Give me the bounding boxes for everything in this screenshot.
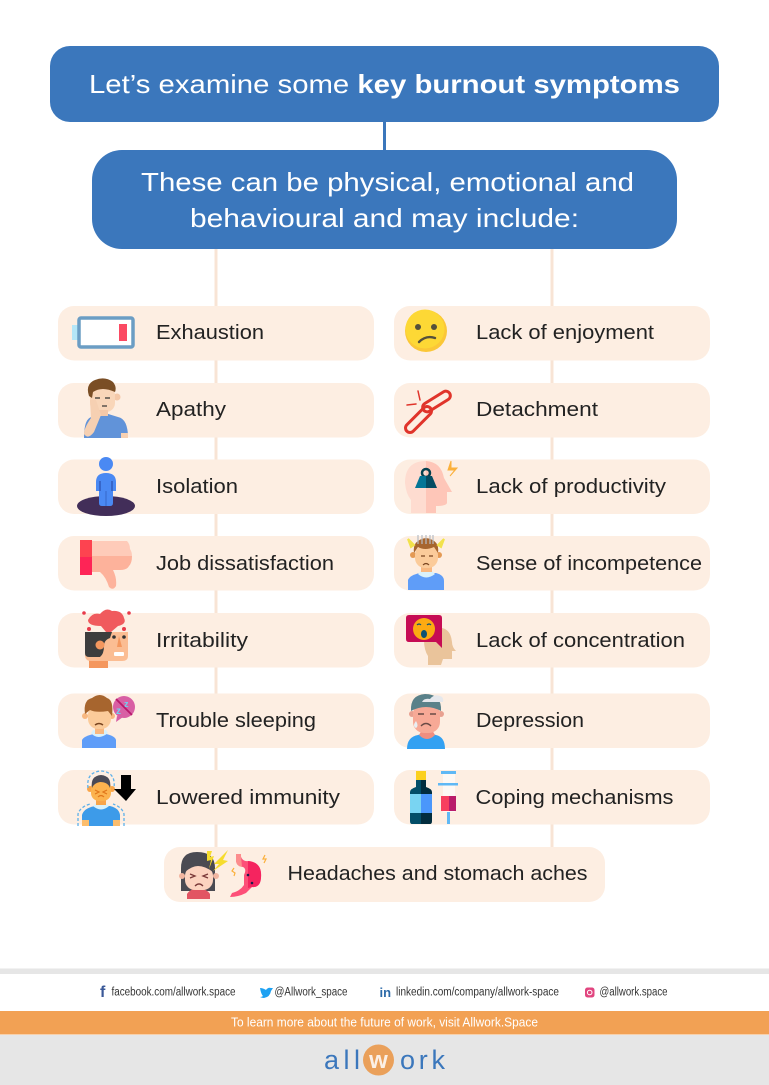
icon: instagram xyxy=(585,988,594,998)
icon: sick man with down arrow xyxy=(78,771,136,826)
icon: thumbs down xyxy=(80,540,132,589)
symptom: Isolation: Isolation xyxy=(156,476,238,498)
symptom: Lack of concentration xyxy=(394,613,710,668)
symptom: Apathy: Apathy xyxy=(156,399,226,421)
symptom: Sense of incompetence: Sense of incompetence xyxy=(476,553,702,575)
symptom: Coping mechanisms: Coping mechanisms xyxy=(476,787,674,809)
logo: allwork: all xyxy=(324,1045,360,1075)
subtitle banner: behavioural and may include: xyxy=(190,203,579,233)
symptom: Trouble sleeping xyxy=(58,694,374,748)
symptom: Exhaustion xyxy=(58,306,374,360)
instagram link: @allwork.space xyxy=(600,986,668,998)
subtitle banner: These can be physical, emotional and xyxy=(141,167,634,197)
icon: bored man xyxy=(84,378,128,438)
symptom: Sense of incompetence xyxy=(394,535,710,590)
symptom: Lack of enjoyment xyxy=(394,306,710,360)
symptom: Detachment: Detachment xyxy=(476,399,598,421)
subtitle banner xyxy=(92,150,677,249)
icon: isolated person xyxy=(77,457,135,516)
logo: allwork: w xyxy=(368,1047,388,1074)
symptom: Job dissatisfaction: Job dissatisfaction xyxy=(156,553,334,575)
footer top band xyxy=(0,968,769,974)
icon: linkedin: in xyxy=(380,985,391,1000)
symptom: Lack of enjoyment: Lack of enjoyment xyxy=(476,322,654,344)
icon: man with crossed-out sleep bubble: z xyxy=(124,699,129,709)
symptom: Irritability: Irritability xyxy=(156,630,248,652)
facebook link: facebook.com/allwork.space xyxy=(112,986,236,998)
icon: broken chain xyxy=(404,389,452,434)
icon: man with crossed-out sleep bubble xyxy=(82,695,135,748)
icon: confused emoji xyxy=(405,310,447,352)
symptom: Irritability xyxy=(58,610,374,668)
footer logo band xyxy=(0,1035,769,1085)
symptom: Exhaustion: Exhaustion xyxy=(156,322,264,344)
call to action strip xyxy=(0,1011,769,1034)
title banner xyxy=(50,46,719,122)
twitter link: @Allwork_space xyxy=(274,986,348,998)
symptom: Lack of productivity xyxy=(394,460,710,514)
symptom: Lack of productivity: Lack of productivity xyxy=(476,476,666,498)
icon: bottle and syringe xyxy=(410,771,458,824)
icon: head exploding xyxy=(82,610,131,668)
title banner: Let’s examine some key burnout symptoms xyxy=(89,69,680,99)
icon: stressed man with pins xyxy=(408,535,444,590)
call to action strip: To learn more about the future of work, visit Allwork.Space xyxy=(231,1016,538,1030)
symptom: Headaches and stomach aches: Headaches and stomach aches xyxy=(288,863,588,885)
icon: head with speech bubble xyxy=(406,615,456,665)
icon: girl with headache xyxy=(179,850,228,899)
symptom: Job dissatisfaction xyxy=(58,536,374,590)
icon: depressed man with cloud xyxy=(407,694,445,749)
icon: low battery xyxy=(72,318,133,347)
symptom: Lack of concentration: Lack of concentration xyxy=(476,630,685,652)
linkedin link: linkedin.com/company/allwork-space xyxy=(396,986,559,998)
symptom: Isolation xyxy=(58,457,374,516)
icon: weight in head xyxy=(405,461,457,513)
social links row xyxy=(100,984,668,1001)
symptom: Headaches and stomach aches xyxy=(164,847,605,902)
icon: stomach xyxy=(230,854,266,897)
logo: allwork xyxy=(324,1044,446,1076)
icon: twitter xyxy=(260,988,273,998)
icon: man with crossed-out sleep bubble: z xyxy=(116,706,121,717)
symptom: Lowered immunity: Lowered immunity xyxy=(156,787,340,809)
logo: allwork: ork xyxy=(400,1045,446,1075)
symptom: Trouble sleeping: Trouble sleeping xyxy=(156,710,316,732)
icon: facebook: f xyxy=(100,984,106,1001)
symptom: Coping mechanisms xyxy=(394,770,710,824)
symptom: Lowered immunity xyxy=(58,770,374,826)
symptom: Depression: Depression xyxy=(476,710,584,732)
symptom: Depression xyxy=(394,694,710,749)
symptom: Apathy xyxy=(58,378,374,438)
symptom: Detachment xyxy=(394,383,710,438)
